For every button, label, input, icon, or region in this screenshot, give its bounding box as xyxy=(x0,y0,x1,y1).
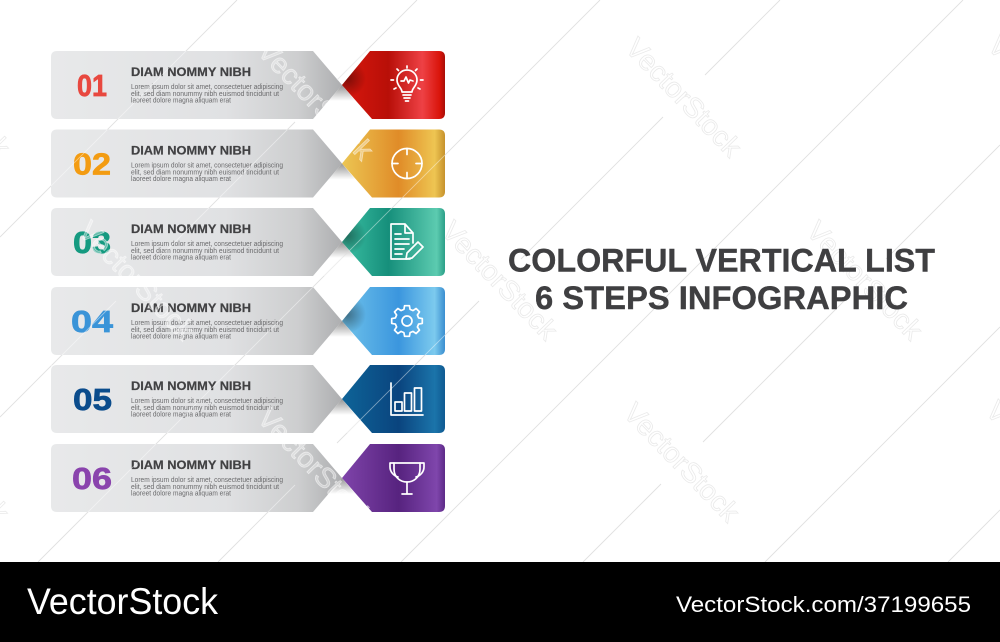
body text: step 06: elit, sed diam nonummy nibh euismod tincidunt ut xyxy=(131,484,279,491)
body text: step 05: laoreet dolore magna aliquam erat xyxy=(131,412,231,418)
step 04 row xyxy=(51,287,445,355)
watermark: VectorStock stamps behind content: VectorStock xyxy=(618,397,746,529)
icon: target xyxy=(392,148,422,178)
tab shadow: step 01 xyxy=(327,85,357,103)
footer url: VectorStock.com/37199655 xyxy=(676,592,971,617)
watermark: VectorStock stamps behind content: VectorStock xyxy=(436,215,564,347)
icon: bar chart xyxy=(391,383,423,415)
watermark: VectorStock stamps behind content: VectorStock xyxy=(620,32,748,164)
body text: step 03: laoreet dolore magna aliquam erat xyxy=(131,254,231,262)
footer brand: VectorStock xyxy=(27,581,218,622)
tab shadow: step 04 xyxy=(327,321,357,339)
panel: step 02 gold tab xyxy=(342,130,445,198)
icon: gear xyxy=(392,306,422,336)
footer bar xyxy=(0,562,1000,642)
tab shadow: step 06 xyxy=(327,478,357,496)
body text: step 04: elit, sed diam nonummy nibh euismod tincidunt ut xyxy=(131,327,279,334)
heading: step 04: DIAM NOMMY NIBH xyxy=(131,301,251,315)
step 06 row xyxy=(51,444,445,512)
watermark: VectorStock stamps over panels xyxy=(73,35,380,534)
watermark: VectorStock stamps behind content: VectorStock xyxy=(801,215,929,347)
body text: step 04: laoreet dolore magna aliquam erat xyxy=(131,334,231,340)
panel: step 01 red tab xyxy=(342,51,445,119)
heading: step 03: DIAM NOMMY NIBH xyxy=(131,222,251,236)
body text: step 01 xyxy=(131,84,283,104)
body text: step 05: elit, sed diam nonummy nibh euismod tincidunt ut xyxy=(131,405,279,412)
heading: step 02: DIAM NOMMY NIBH xyxy=(131,144,251,158)
step 02 row xyxy=(51,130,445,198)
heading: step 05: DIAM NOMMY NIBH xyxy=(131,379,251,393)
body text: step 04 xyxy=(131,320,283,340)
step 05 row xyxy=(51,365,445,433)
icon: light bulb xyxy=(391,66,423,101)
body text: step 01: Lorem ipsum dolor sit amet, consectetuer adipiscing xyxy=(131,84,283,91)
body text: step 03: elit, sed diam nonummy nibh euismod tincidunt ut xyxy=(131,248,279,255)
body text: step 06: laoreet dolore magna aliquam erat xyxy=(131,490,231,498)
panel: step 06 purple tab xyxy=(342,444,445,512)
tab shadow: step 02 xyxy=(327,164,357,182)
title: COLORFUL VERTICAL LIST xyxy=(508,242,935,278)
body text: step 02 xyxy=(131,162,283,183)
panel: step 03 teal tab xyxy=(342,208,445,276)
body text: step 01: laoreet dolore magna aliquam erat xyxy=(131,98,231,104)
panel: step 03 grey arrow xyxy=(51,208,342,276)
heading: step 06: DIAM NOMMY NIBH xyxy=(131,458,251,472)
body text: step 02: Lorem ipsum dolor sit amet, consectetuer adipiscing xyxy=(131,162,283,169)
title: 6 STEPS INFOGRAPHIC xyxy=(535,280,908,316)
body text: step 04: Lorem ipsum dolor sit amet, consectetuer adipiscing xyxy=(131,320,283,327)
title xyxy=(508,242,935,316)
body text: step 03: Lorem ipsum dolor sit amet, consectetuer adipiscing xyxy=(131,241,283,248)
panel: step 06 grey arrow xyxy=(51,444,342,512)
watermark: VectorStock stamps behind content xyxy=(0,30,1000,529)
panel: step 02 grey arrow xyxy=(51,130,342,198)
watermark: VectorStock stamps over panels: VectorStock xyxy=(252,35,380,167)
tab shading: step 03 xyxy=(342,208,370,254)
number 02: 02 xyxy=(73,146,111,182)
watermark: overlay lines on panels xyxy=(51,51,445,512)
body text: step 02: elit, sed diam nonummy nibh euismod tincidunt ut xyxy=(131,169,279,176)
tab shading: step 01 xyxy=(342,51,370,97)
step 03 row xyxy=(51,208,445,276)
panel: step 01 grey arrow xyxy=(51,51,342,119)
panel: step 04 blue tab xyxy=(342,287,445,355)
body text: step 06: Lorem ipsum dolor sit amet, consectetuer adipiscing xyxy=(131,477,283,484)
number 01: 01 xyxy=(77,68,107,103)
panel: step 05 navy tab xyxy=(342,365,445,433)
icon: document and pencil xyxy=(391,224,423,259)
body text: step 01: elit, sed diam nonummy nibh euismod tincidunt ut xyxy=(131,91,279,98)
watermark: VectorStock stamps over panels: VectorStock xyxy=(252,402,380,534)
panel: step 04 grey arrow xyxy=(51,287,342,355)
panel: step 05 grey arrow xyxy=(51,365,342,433)
step 01 row xyxy=(51,51,445,119)
body text: step 02: laoreet dolore magna aliquam erat xyxy=(131,176,231,183)
number 04: 04 xyxy=(71,304,114,339)
number 05: 05 xyxy=(73,382,112,417)
body text: step 05 xyxy=(131,398,283,418)
body text: step 06 xyxy=(131,477,283,498)
tab shadow: step 05 xyxy=(327,399,357,417)
body text: step 03 xyxy=(131,241,283,262)
tab shading: step 04 xyxy=(342,287,370,333)
watermark: VectorStock stamps over panels: VectorStock xyxy=(73,215,201,347)
icon: trophy xyxy=(390,463,424,494)
tab shadow: step 03 xyxy=(327,242,357,260)
heading: step 01: DIAM NOMMY NIBH xyxy=(131,65,251,79)
body text: step 05: Lorem ipsum dolor sit amet, consectetuer adipiscing xyxy=(131,398,283,405)
number 06: 06 xyxy=(72,461,112,496)
number 03: 03 xyxy=(73,225,111,260)
